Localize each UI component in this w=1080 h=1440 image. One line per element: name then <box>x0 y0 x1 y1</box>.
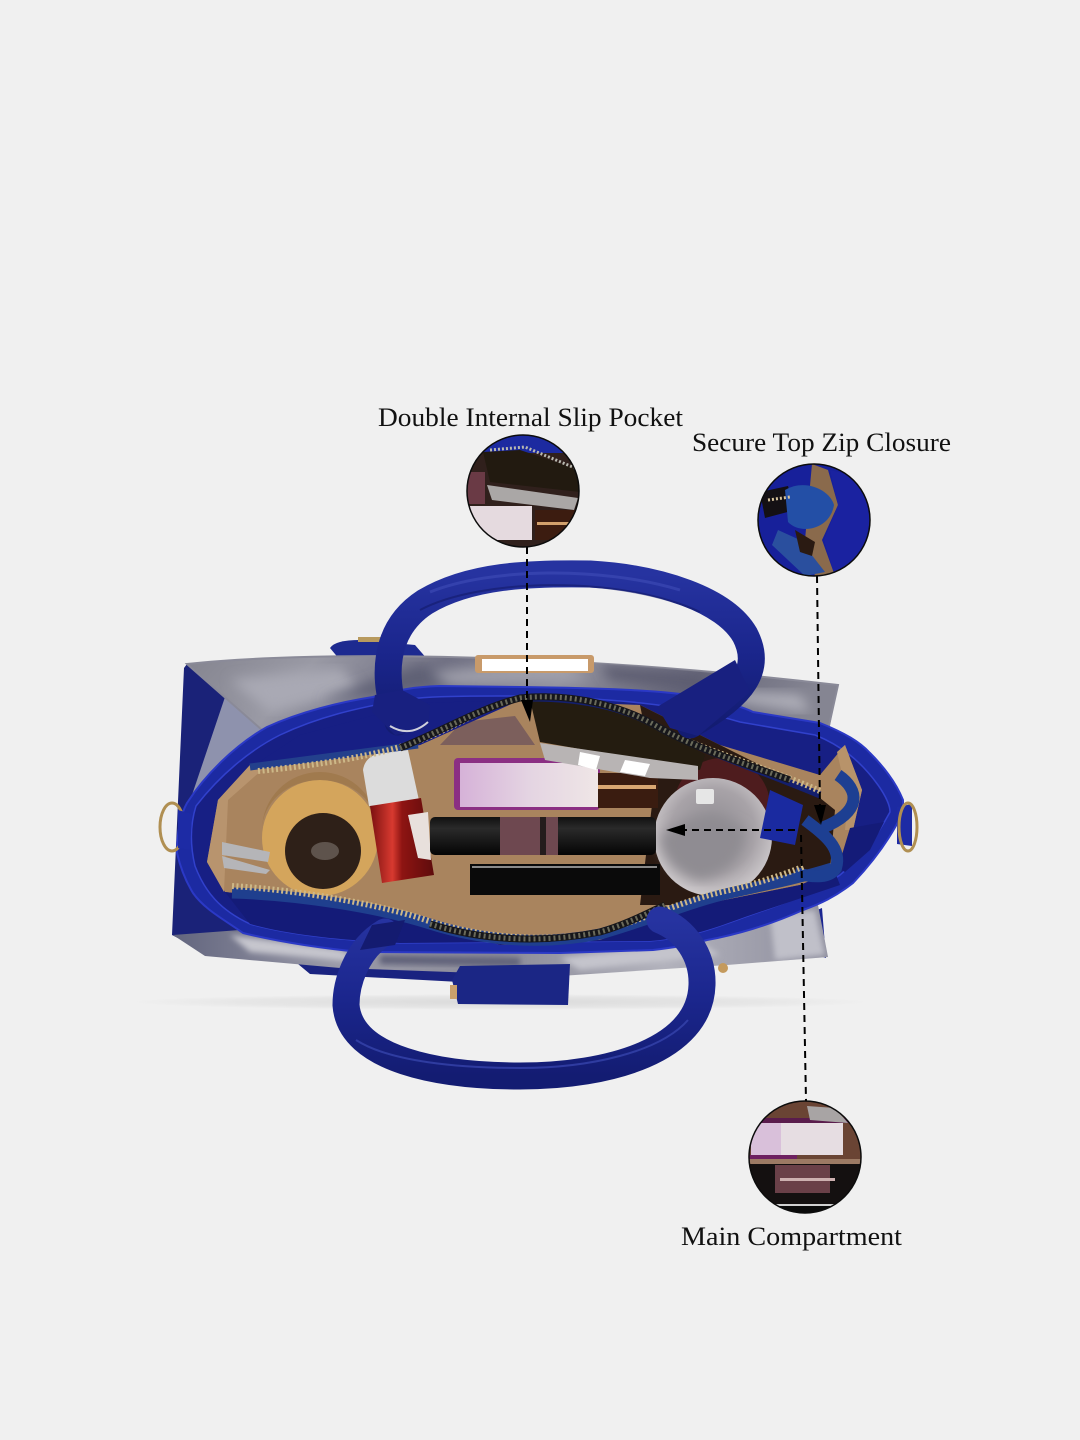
zipper tape lower <box>232 868 832 940</box>
front handle <box>346 920 702 1076</box>
gold clasp <box>475 655 594 673</box>
left gold ring <box>160 803 192 851</box>
top flap left <box>250 700 520 768</box>
red bottle <box>363 750 434 883</box>
right blue pad <box>838 822 884 872</box>
label: Double Internal Slip Pocket <box>378 403 684 432</box>
callout: secure top zip closure <box>692 428 951 576</box>
side panel left <box>172 664 262 952</box>
front blue strip <box>298 964 460 982</box>
mascara <box>430 817 656 855</box>
zipper top <box>258 697 822 792</box>
connector: compartment line <box>801 835 806 1101</box>
mauve tube <box>440 716 535 745</box>
black tube <box>470 864 660 895</box>
silver compact <box>654 778 772 896</box>
detail circle <box>758 464 870 576</box>
side panel right <box>812 685 838 958</box>
phone <box>530 700 705 780</box>
lower flap <box>225 872 840 945</box>
back panel metallic <box>187 656 838 730</box>
handbag <box>160 573 917 1076</box>
yellow ball <box>262 772 378 896</box>
side panel highlight <box>192 697 262 795</box>
rim outer <box>177 686 903 953</box>
detail circle <box>467 435 580 547</box>
zipper tape upper right <box>530 698 820 795</box>
connector: compartment arrow <box>666 824 795 836</box>
rivet <box>718 963 728 973</box>
front panel metallic <box>173 905 828 976</box>
label: Secure Top Zip Closure <box>692 428 951 457</box>
detail circle <box>749 1101 861 1214</box>
right gold ring <box>897 803 917 851</box>
back handle <box>372 573 751 736</box>
cosmetics contents <box>222 700 772 896</box>
pink perfume bottle <box>454 758 658 810</box>
connector: zip closure <box>814 576 826 825</box>
zipper puller blue loop <box>795 775 854 876</box>
front tab <box>450 964 570 1005</box>
connector: slip pocket <box>521 547 533 722</box>
zipper tab <box>760 790 803 845</box>
callout: main compartment <box>681 1101 903 1251</box>
callout: double internal slip pocket <box>378 403 684 547</box>
interior lining <box>207 700 862 945</box>
interior light lining right <box>837 745 862 830</box>
dashed connectors <box>521 547 826 1101</box>
zipper dark overlays <box>400 697 790 939</box>
ground shadow <box>130 994 870 1010</box>
zipper bottom <box>232 866 805 938</box>
dark red compact behind <box>674 758 770 854</box>
rim inner navy <box>191 696 890 943</box>
label: Main Compartment <box>681 1222 903 1251</box>
cards <box>222 842 270 874</box>
infographic canvas <box>158 408 950 1250</box>
rear clasp tab <box>330 637 428 660</box>
dark recess right <box>640 705 835 905</box>
